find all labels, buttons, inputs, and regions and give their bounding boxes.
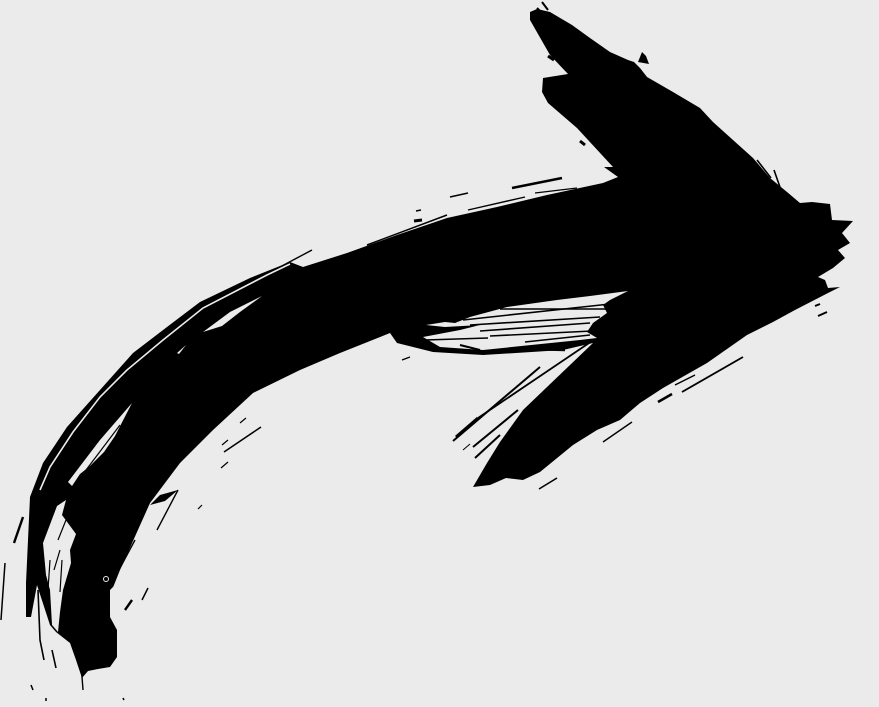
dry-brush patch under the shaft [423, 291, 628, 350]
dry-brush highlights in the curve [43, 296, 262, 632]
black flecks over the highlights [48, 425, 120, 592]
sliver on the inner curve [150, 490, 178, 505]
tip flake [638, 52, 649, 64]
gap between outer bristle band and stroke body [40, 264, 290, 490]
